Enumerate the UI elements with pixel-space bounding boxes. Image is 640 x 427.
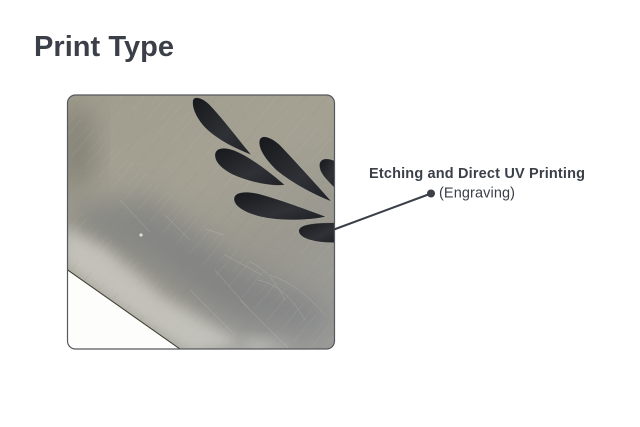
dark corner shading at top left — [62, 105, 96, 200]
white corner background — [68, 271, 178, 348]
callout subtext: (Engraving) — [439, 186, 515, 202]
bright reflection band — [68, 225, 240, 348]
panel border — [68, 95, 334, 349]
brushed metal texture — [67, 95, 335, 349]
callout heading: Etching and Direct UV Printing — [369, 166, 585, 182]
sheet edge — [67, 270, 180, 349]
lower right reflection — [243, 334, 283, 348]
white speck — [139, 233, 143, 237]
engraved leaves — [193, 98, 337, 243]
dark band across the sheet — [70, 195, 330, 335]
scratches — [120, 200, 325, 348]
panel: metal photo — [60, 95, 337, 355]
callout leader line — [334, 190, 435, 230]
title: Print Type — [34, 31, 174, 63]
